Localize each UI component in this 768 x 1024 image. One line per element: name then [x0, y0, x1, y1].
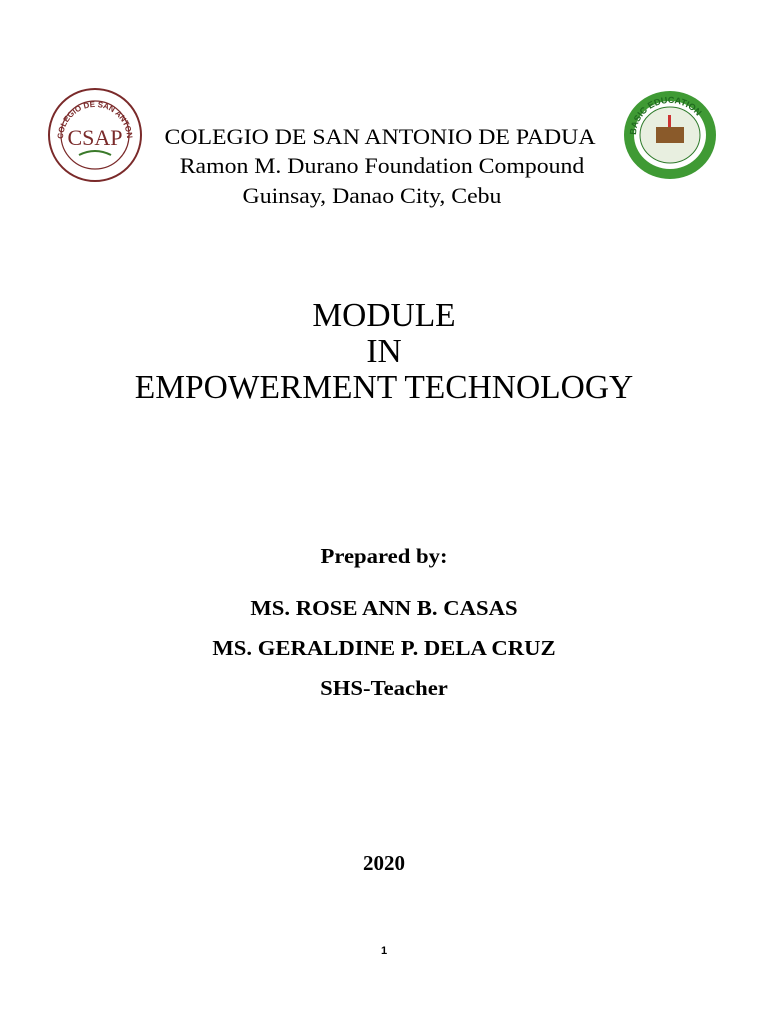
logo: basic education: BASIC EDUCATION: [630, 96, 702, 134]
authors: [212, 596, 556, 700]
header: school name and address: [165, 124, 596, 208]
header: school name and address: COLEGIO DE SAN ANTONIO DE PADUA: [165, 124, 595, 149]
header: school name and address: Ramon M. Durano Foundation Compound: [180, 153, 584, 178]
title: [135, 297, 633, 406]
header: school name and address: Guinsay, Danao City, Cebu: [243, 183, 501, 208]
logo: CSAP seal: [48, 88, 142, 182]
title: MODULE: [312, 297, 456, 334]
authors: MS. GERALDINE P. DELA CRUZ: [212, 636, 556, 660]
logo: basic education: [624, 91, 716, 179]
prepared by label: Prepared by:: [320, 544, 448, 568]
page number: 1: [381, 945, 387, 957]
title: EMPOWERMENT TECHNOLOGY: [135, 369, 633, 406]
year: 2020: [363, 851, 405, 875]
title: IN: [366, 333, 402, 370]
authors: MS. ROSE ANN B. CASAS: [250, 596, 518, 620]
authors: SHS-Teacher: [320, 676, 448, 700]
logo: CSAP seal: CSAP: [67, 125, 123, 150]
